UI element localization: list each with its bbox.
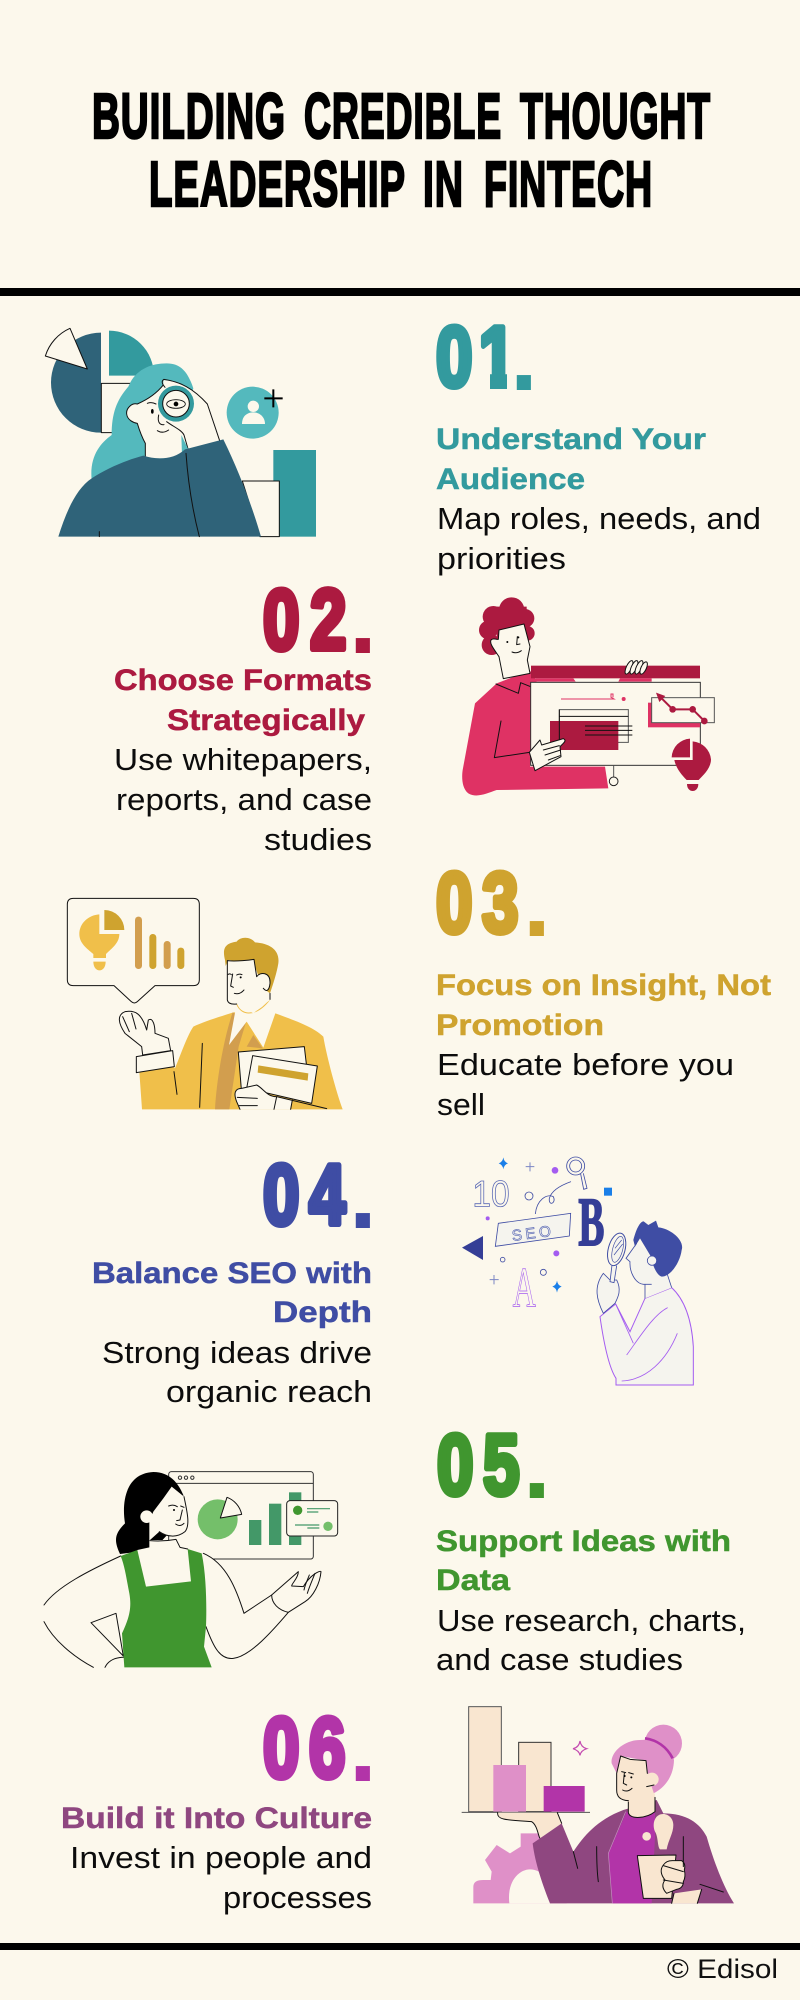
step 06 text: . — [349, 1691, 377, 1803]
title: CREDIBLE — [304, 80, 502, 152]
step 01 text: Audience — [436, 463, 585, 496]
step 01 text: 1 — [479, 310, 515, 405]
step 05 text: Data — [436, 1564, 510, 1597]
step 05 text — [436, 1408, 746, 1677]
title: IN — [423, 148, 464, 220]
step 02 text: Choose Formats — [114, 664, 372, 697]
step 04 text: organic reach — [166, 1374, 372, 1409]
illustration: man with speech bubble — [67, 898, 343, 1109]
step 03 text: Educate before you — [437, 1047, 734, 1082]
step 01 text: priorities — [437, 541, 566, 576]
footer credit: © Edisol — [667, 1954, 778, 1984]
illustration: SEO man with magnifier — [462, 1157, 693, 1385]
step 05 text: Use research, charts, — [437, 1603, 746, 1638]
step 02 text: studies — [264, 822, 372, 857]
step 02 text: reports, and case — [116, 782, 372, 817]
step 05 text: Support Ideas with — [436, 1525, 731, 1558]
step 05 text: 0 — [437, 1418, 474, 1513]
step 04 text: 0 — [263, 1148, 300, 1243]
step 02 text: Use whitepapers, — [114, 742, 372, 777]
step 06 text: Invest in people and — [70, 1840, 372, 1875]
step 02 text: Strategically — [167, 704, 365, 737]
title — [92, 80, 711, 220]
step 03 text: Focus on Insight, Not — [436, 969, 771, 1002]
step 05 text: . — [523, 1408, 551, 1520]
illustration: SEO man with magnifier: A — [513, 1258, 536, 1320]
step 03 text: 0 — [436, 856, 472, 951]
illustration: woman with magnifier — [45, 328, 316, 537]
step 02 text: 2 — [310, 573, 346, 668]
step 01 text — [436, 300, 761, 576]
step 01 text: Understand Your — [436, 423, 706, 456]
illustration: man presenting board — [462, 597, 714, 795]
step 01 text: 0 — [436, 310, 472, 405]
step 01 text: . — [510, 300, 538, 412]
step 04 text — [92, 1138, 377, 1409]
step 05 text: 5 — [483, 1418, 520, 1513]
step 05 text: and case studies — [436, 1642, 683, 1677]
step 01 text: Map roles, needs, and — [437, 501, 761, 536]
step 03 text — [436, 846, 771, 1122]
step 04 text: . — [349, 1138, 377, 1250]
step 06 text: 6 — [309, 1701, 346, 1796]
step 04 text: 4 — [309, 1148, 346, 1243]
step 03 text: 3 — [482, 856, 518, 951]
step 02 text — [114, 563, 377, 857]
step 06 text: 0 — [263, 1701, 300, 1796]
step 04 text: Balance SEO with — [92, 1257, 372, 1290]
step 03 text: Promotion — [436, 1009, 604, 1042]
illustration: woman in green apron with dashboard — [44, 1472, 338, 1667]
title: LEADERSHIP — [149, 148, 406, 220]
step 06 text: processes — [223, 1880, 372, 1915]
step 04 text: Strong ideas drive — [102, 1335, 372, 1370]
step 03 text: . — [523, 846, 551, 958]
illustration: SEO man with magnifier: 10 — [472, 1173, 510, 1215]
illustration: SEO man with magnifier: B — [578, 1184, 604, 1260]
step 04 text: Depth — [273, 1296, 372, 1329]
illustration: woman with bar chart tray and gear — [462, 1707, 734, 1903]
step 02 text: 0 — [263, 573, 300, 668]
title: BUILDING — [92, 80, 286, 152]
step 06 text: Build it Into Culture — [61, 1802, 372, 1835]
step 06 text — [61, 1691, 377, 1915]
step 02 text: . — [349, 563, 377, 675]
illustration: SEO man with magnifier: SEO — [511, 1223, 552, 1245]
title: FINTECH — [484, 148, 653, 220]
step 03 text: sell — [437, 1087, 485, 1122]
